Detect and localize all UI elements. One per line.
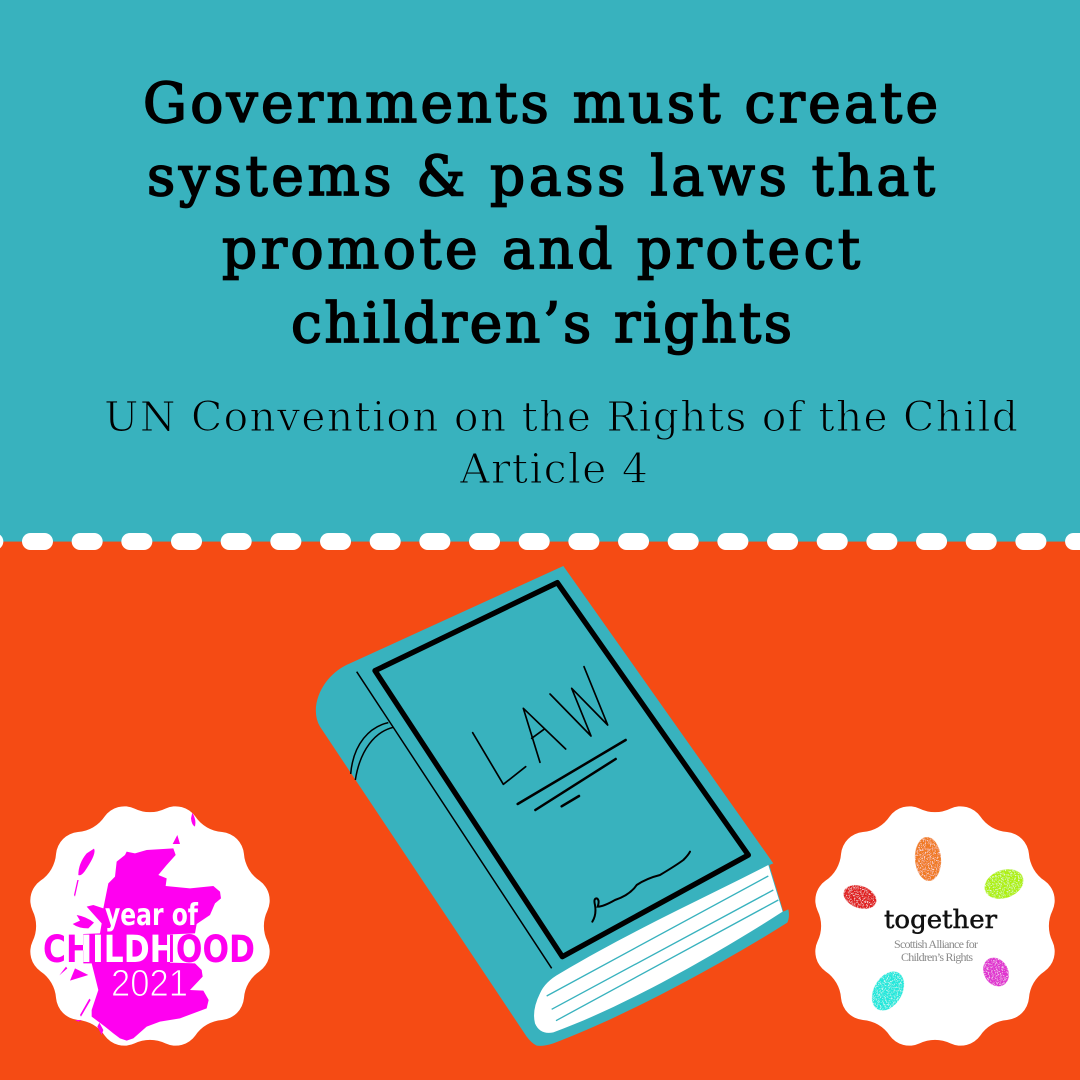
badge: together Scottish Alliance for Children's Rights bbox=[815, 806, 1055, 1046]
icon: red fingerprint bbox=[840, 881, 880, 913]
icon: magenta fingerprint bbox=[978, 953, 1014, 991]
badge: year of childhood 2021 bbox=[30, 806, 270, 1046]
subtitle: source article bbox=[104, 393, 1018, 493]
hand-drawn LAW lettering bbox=[473, 667, 608, 784]
scalloped white badge bbox=[815, 806, 1055, 1046]
panel: orange bottom section bbox=[0, 542, 1080, 1080]
panel: teal top section bbox=[0, 0, 1080, 542]
title: children’s rights bbox=[291, 291, 792, 355]
title: Governments must create bbox=[143, 71, 938, 135]
map of Scotland bbox=[59, 813, 221, 1041]
title: systems & pass laws that bbox=[147, 144, 935, 208]
subtitle: source article: UN Convention on the Rights of the Child bbox=[104, 393, 1018, 441]
text: Scottish Alliance for Children's Rights bbox=[894, 937, 978, 964]
signature bbox=[592, 852, 690, 922]
icon: law book bbox=[316, 566, 789, 1046]
title underlines bbox=[518, 740, 626, 810]
dashed divider bbox=[0, 533, 1080, 550]
title: promote and protect bbox=[222, 217, 860, 281]
text: CHILDHOOD magenta layer: CHILDHOOD bbox=[43, 928, 255, 971]
text: Scottish Alliance for Children's Rights: Scottish Alliance for bbox=[894, 937, 978, 951]
spine details bbox=[351, 672, 552, 968]
book cover bbox=[316, 566, 789, 1046]
page lines bbox=[547, 876, 778, 1021]
text: Scottish Alliance for Children's Rights: Children’s Rights bbox=[901, 950, 973, 964]
book pages bbox=[534, 865, 783, 1033]
title bbox=[143, 71, 938, 355]
text: CHILDHOOD white knockout layer: CHILDHOOD bbox=[43, 928, 255, 971]
text: year of: year of bbox=[105, 898, 199, 933]
scalloped white badge bbox=[30, 806, 270, 1046]
text: 2021: 2021 bbox=[111, 963, 188, 1005]
cover frame bbox=[375, 583, 748, 957]
text: together: together bbox=[884, 905, 997, 934]
icon: orange fingerprint bbox=[913, 836, 943, 882]
subtitle: source article: Article 4 bbox=[459, 445, 648, 493]
icon: lime fingerprint bbox=[980, 864, 1028, 904]
icon: cyan fingerprint bbox=[865, 966, 911, 1016]
